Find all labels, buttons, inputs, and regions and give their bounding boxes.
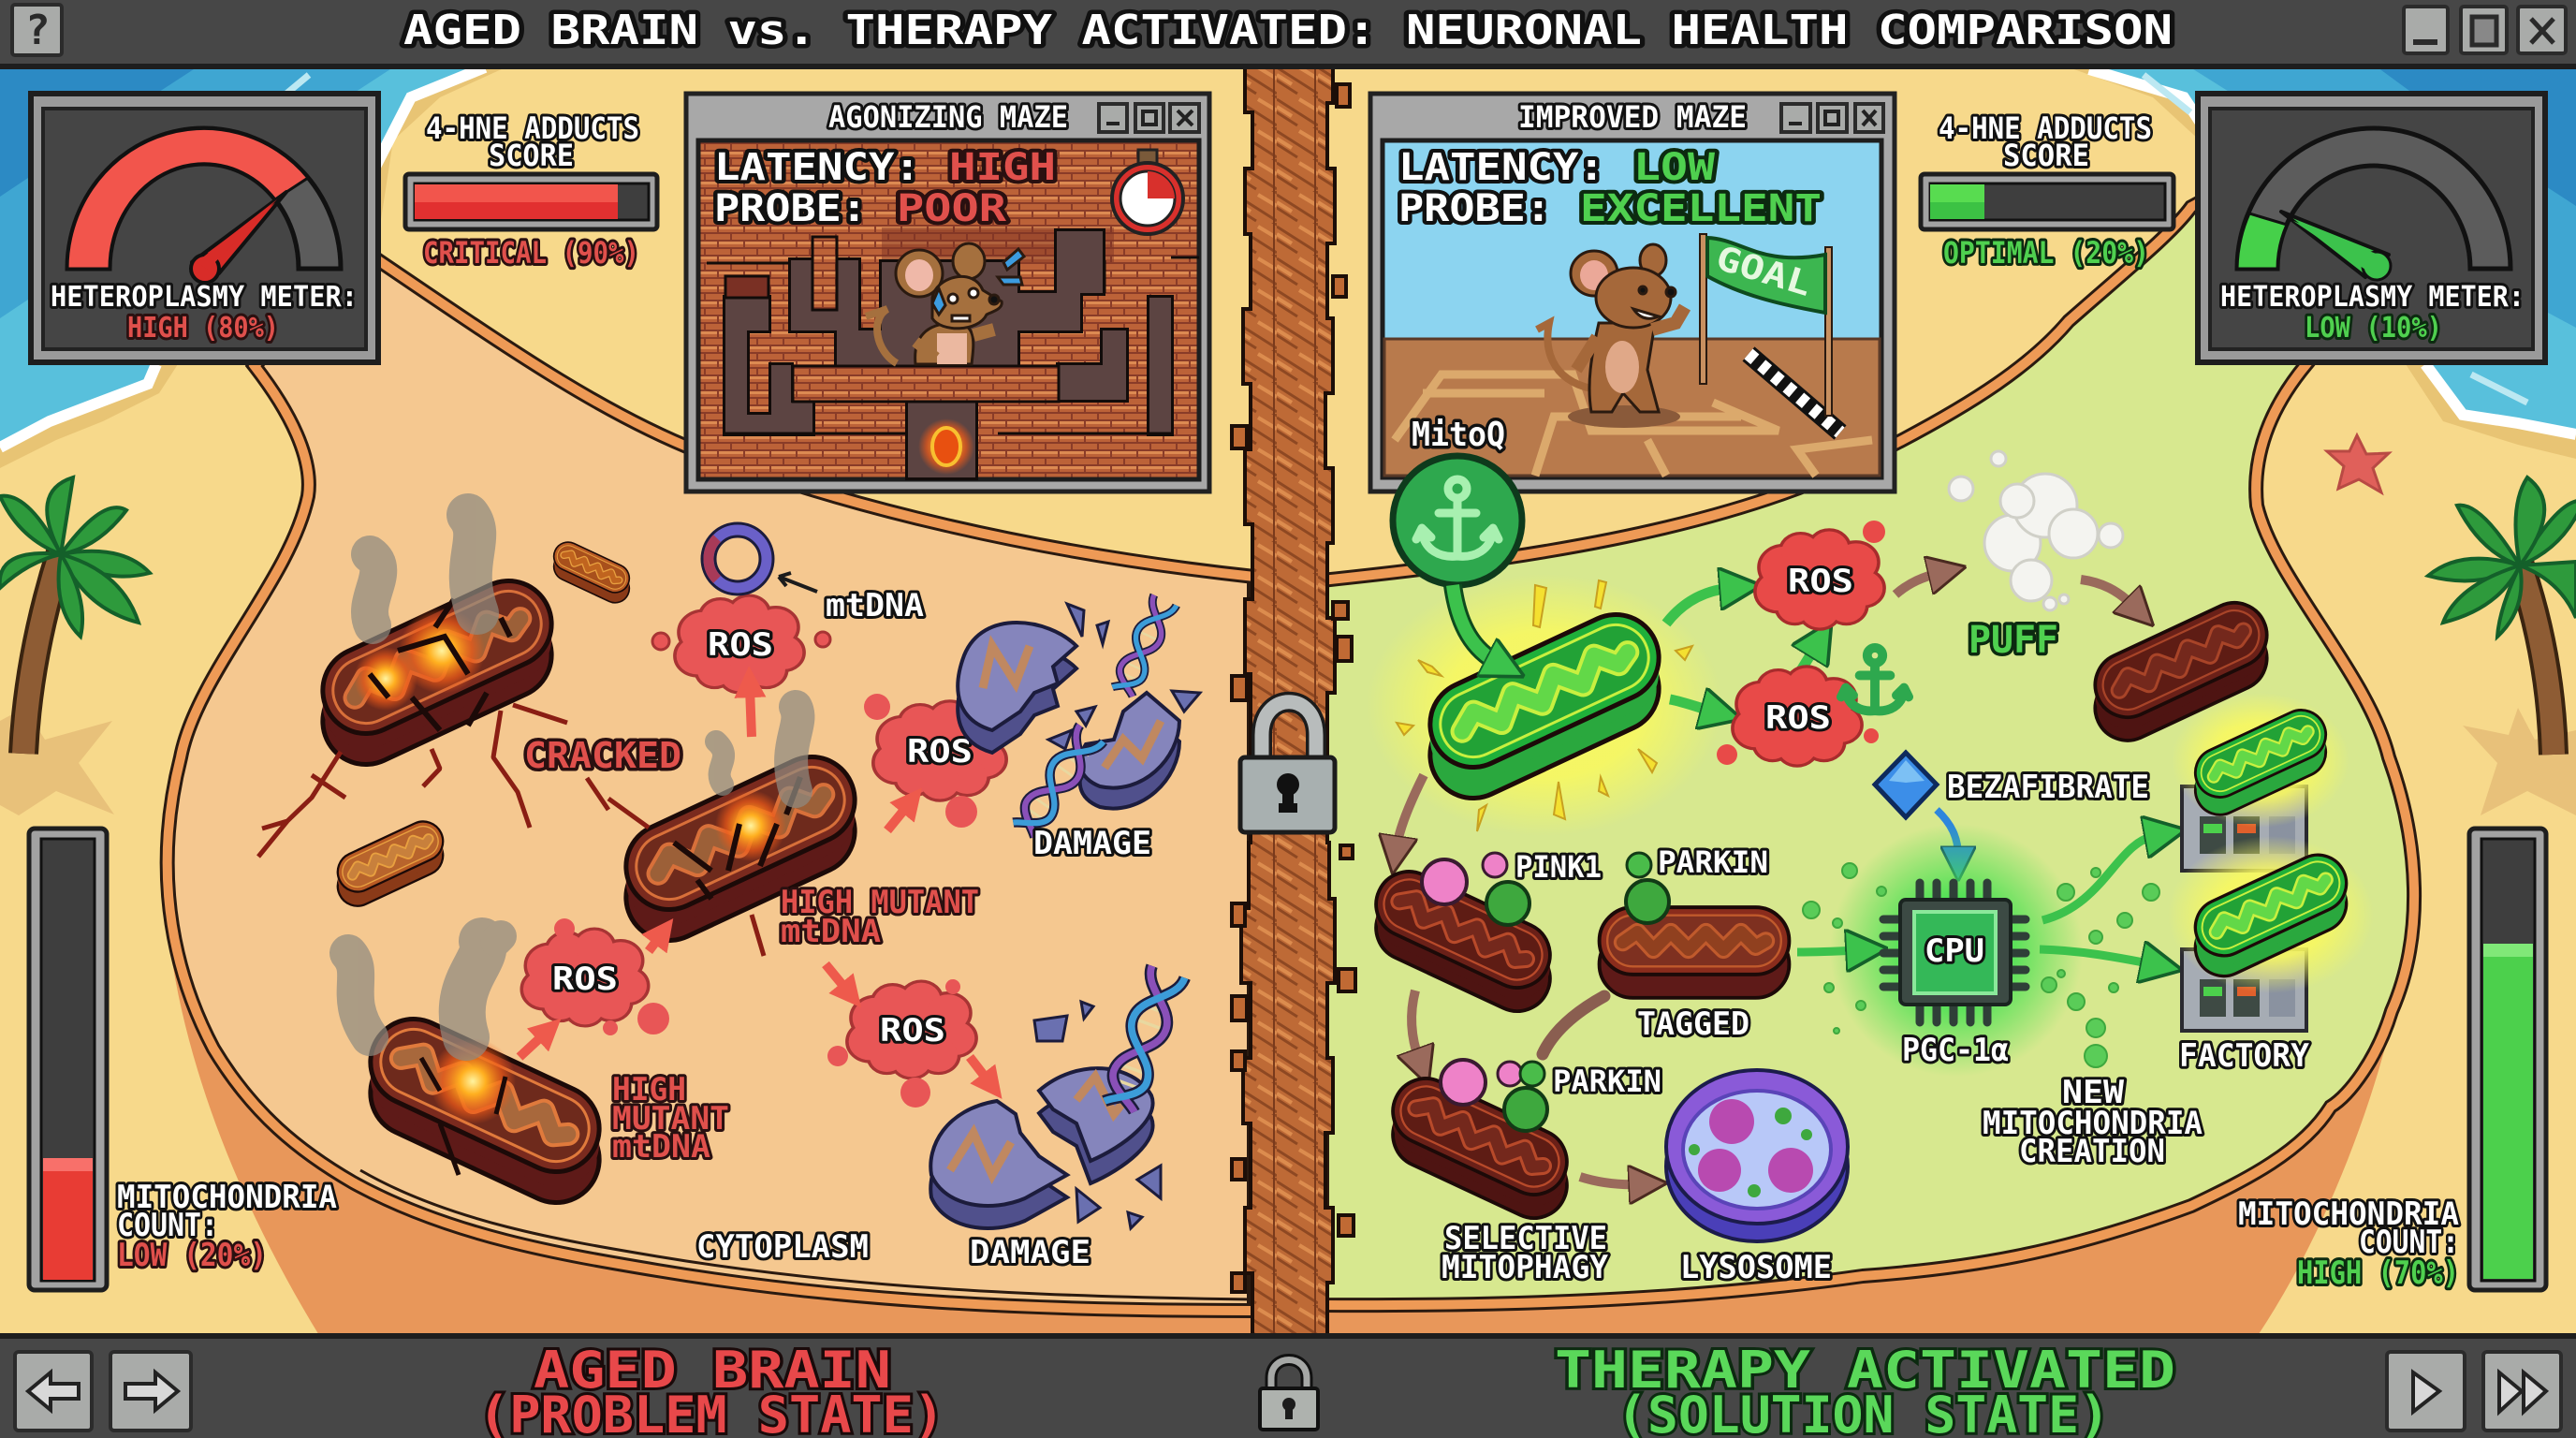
- Parkin label upper: PARKIN: [1658, 844, 1768, 880]
- damaged mitochondrion upper: [958, 594, 1200, 838]
- right ocean corner: [2069, 67, 2576, 459]
- left mitochondria count bar: [29, 829, 107, 1290]
- Parkin protein: [1486, 882, 1530, 925]
- play button: [2387, 1352, 2465, 1431]
- left mitochondria count label: MITOCHONDRIA: [117, 1179, 337, 1216]
- blue arrow to CPU: [1937, 810, 1958, 857]
- selective mitophagy label: SELECTIVE: [1444, 1220, 1607, 1257]
- cracked label: CRACKED: [524, 735, 681, 776]
- probe value: EXCELLENT: [1580, 187, 1822, 230]
- panel: agonizing maze window: [686, 94, 1209, 492]
- high mutant mtDNA label centre: HIGH MUTANT: [781, 884, 979, 921]
- left mitochondria count label: LOW (20%): [117, 1237, 267, 1274]
- help button: ?: [25, 7, 51, 54]
- aged brain caption: AGED BRAIN: [534, 1341, 891, 1400]
- mtDNA arrow: [779, 573, 817, 592]
- title: AGED BRAIN vs. THERAPY ACTIVATED: NEURONAL HEALTH COMPARISON: [403, 7, 2173, 54]
- right mitochondria count label: MITOCHONDRIA: [2238, 1196, 2459, 1233]
- padlock centre: [1240, 702, 1335, 832]
- gauge arc: [2237, 128, 2510, 280]
- brown connector tagged to mitophagy: [1543, 996, 1604, 1054]
- left ocean corner: [0, 67, 505, 468]
- panel: left heteroplasmy gauge: [31, 94, 378, 362]
- new mitochondria creation label: MITOCHONDRIA: [1983, 1105, 2203, 1142]
- icon: CPU chip: [1883, 883, 2026, 1022]
- high mutant mtDNA label centre: mtDNA: [781, 913, 881, 950]
- panel: left 4-HNE score: [405, 110, 657, 271]
- right mitochondria count label: [2238, 1196, 2459, 1292]
- puff label: PUFF: [1969, 619, 2058, 662]
- maze corridors: [707, 231, 1199, 477]
- panel: left 4-HNE score: SCORE: [489, 138, 574, 173]
- icon: small anchor: [1841, 648, 1909, 711]
- small pink marker: [1483, 853, 1507, 877]
- mitochondrion: cracked top: [309, 566, 565, 779]
- gauge label: HETEROPLASMY METER:: [51, 281, 358, 314]
- high mutant mtDNA label lower: mtDNA: [612, 1128, 710, 1166]
- high mutant mtDNA label lower: MUTANT: [612, 1100, 729, 1137]
- PINK1 protein: [1422, 859, 1467, 904]
- small parkin marker: [1627, 853, 1651, 877]
- maze centre wall: [793, 366, 1059, 402]
- therapy activated caption: [1555, 1341, 2175, 1438]
- ROS cloud lower left: [523, 918, 669, 1035]
- icon: exit coin: [918, 418, 974, 475]
- brown arrows through puff: [1895, 573, 2134, 607]
- green glow behind CPU: [1830, 824, 2083, 1077]
- right mitochondria count label: HIGH (70%): [2297, 1255, 2459, 1292]
- PINK1 label: PINK1: [1515, 849, 1602, 885]
- green arrows to factories: [2040, 835, 2157, 964]
- fast forward button: [2483, 1352, 2561, 1431]
- icon: CPU chip: CPU: [1925, 932, 1984, 970]
- mitochondrion: activated green: [1416, 600, 1673, 813]
- anchor badge MitoQ: [1393, 456, 1522, 585]
- gauge value: HIGH (80%): [127, 312, 279, 345]
- maze floor: [1384, 339, 1880, 476]
- icon: lysosome: [1666, 1070, 1848, 1241]
- ROS cloud lower right: [827, 979, 974, 1108]
- right mitochondria count label: COUNT:: [2359, 1224, 2459, 1261]
- cytoplasm label: CYTOPLASM: [696, 1228, 869, 1266]
- mitochondrion: high mutant centre: [612, 742, 869, 955]
- lysosome label: LYSOSOME: [1680, 1249, 1832, 1286]
- icon: happy mouse: [1537, 244, 1685, 428]
- mitochondrion on factory top: [2172, 693, 2349, 828]
- damage label lower: DAMAGE: [970, 1234, 1090, 1271]
- probe label: PROBE:: [1398, 187, 1551, 230]
- ROS cloud lower right: ROS: [880, 1012, 945, 1049]
- gauge arc: [67, 128, 341, 283]
- icon: struggling mouse: [866, 243, 1024, 364]
- forward arrow button: [110, 1352, 191, 1431]
- right mitochondria count bar: [2469, 829, 2546, 1290]
- selective mitophagy label: MITOPHAGY: [1442, 1249, 1609, 1286]
- window buttons: [2404, 7, 2566, 53]
- high mutant mtDNA label lower: HIGH: [612, 1071, 686, 1108]
- gauge label: HETEROPLASMY METER:: [2220, 281, 2525, 314]
- latency value: LOW: [1633, 146, 1716, 189]
- panel: right heteroplasmy gauge: [2198, 94, 2545, 362]
- gauge value: LOW (10%): [2305, 312, 2442, 345]
- mitochondrion: high mutant lower: [357, 1005, 613, 1217]
- darker upper bricks: [882, 227, 1114, 262]
- ROS cloud top: ROS: [708, 626, 773, 664]
- Parkin label lower: PARKIN: [1553, 1064, 1661, 1099]
- small mitochondrion top: [549, 537, 634, 608]
- red ROS arrows: [520, 688, 988, 1081]
- panel: aged brain cell: [164, 243, 1254, 1337]
- icon: stopwatch: [1112, 150, 1183, 234]
- new mitochondria creation label: CREATION: [2019, 1133, 2165, 1170]
- therapy activated caption: THERAPY ACTIVATED: [1555, 1341, 2175, 1400]
- ROS cloud lower: [1717, 668, 1879, 765]
- palm tree left: [0, 477, 150, 815]
- smoke plumes: [348, 515, 798, 1037]
- icon: bezafibrate diamond: [1875, 753, 1937, 817]
- panel: right 4-HNE score: OPTIMAL (20%): [1943, 235, 2149, 271]
- panel: right 4-HNE score: 4-HNE ADDUCTS: [1939, 110, 2152, 146]
- window title: AGONIZING MAZE: [828, 99, 1068, 135]
- icon: mtDNA ring: [709, 530, 767, 588]
- small mitochondrion left: [331, 815, 449, 913]
- high mutant mtDNA label lower: [612, 1071, 729, 1166]
- panel: right 4-HNE score: SCORE: [2003, 138, 2089, 173]
- palm tree right: [2428, 477, 2576, 815]
- green arrows to ROS: [1666, 588, 1816, 712]
- brown arrow to selective mitochondrion: [1412, 990, 1419, 1060]
- new mitochondria creation label: NEW: [2062, 1074, 2125, 1111]
- left mitochondria count label: COUNT:: [117, 1207, 218, 1244]
- bottom padlock: [1260, 1359, 1318, 1430]
- left mitochondria count label: [117, 1179, 337, 1274]
- ROS cloud upper right: [864, 694, 1004, 828]
- back arrow button: [15, 1352, 92, 1431]
- panel: right 4-HNE score: [1921, 110, 2174, 271]
- top bar: [0, 0, 2576, 69]
- factory bottom: [2182, 949, 2306, 1031]
- puff smoke cloud: [1949, 451, 2123, 610]
- ROS cloud upper right: ROS: [907, 733, 973, 770]
- damage label upper: DAMAGE: [1033, 825, 1151, 862]
- mitochondrion on factory bottom: [2168, 836, 2374, 993]
- panel: improved maze window: [1370, 94, 1895, 492]
- green arrow from tagged to CPU: [1797, 950, 1858, 952]
- yellow glow around mitochondrion: [1367, 574, 1722, 836]
- icon: starfish: [2327, 435, 2389, 492]
- latency label: LATENCY:: [714, 146, 920, 189]
- mtDNA label: mtDNA: [826, 587, 924, 624]
- panel: left 4-HNE score: CRITICAL (90%): [423, 235, 639, 271]
- new mitochondria creation label: [1983, 1074, 2203, 1170]
- tagged label: TAGGED: [1637, 1005, 1749, 1043]
- selective mitophagy label: [1442, 1220, 1609, 1286]
- panel: left 4-HNE score: 4-HNE ADDUCTS: [426, 110, 639, 146]
- green arrow from anchor to mitochondrion: [1453, 585, 1498, 663]
- mitochondrion: pink1 tagged: [1366, 859, 1560, 1022]
- high mutant mtDNA label centre: [781, 884, 979, 950]
- aged brain caption: [478, 1341, 944, 1438]
- bottom bar: [0, 1333, 2576, 1438]
- sparks around mitochondrion: [1397, 580, 1692, 831]
- latency label: LATENCY:: [1398, 146, 1604, 189]
- window title: IMPROVED MAZE: [1518, 99, 1747, 135]
- goal flag: GOAL: [1711, 239, 1816, 304]
- ROS cloud lower left: ROS: [552, 961, 618, 998]
- factory label: FACTORY: [2179, 1037, 2310, 1075]
- PGC-1 alpha label: PGC-1α: [1902, 1032, 2009, 1069]
- brown arrow to lysosome: [1580, 1177, 1640, 1184]
- help button: [12, 5, 62, 55]
- probe value: POOR: [897, 187, 1007, 230]
- ROS cloud upper: ROS: [1788, 563, 1853, 600]
- cracks spreading from mitochondrion: [258, 705, 764, 956]
- mitochondrion: tagged: [1600, 880, 1789, 998]
- panel: therapy activated cell: [1322, 187, 2415, 1337]
- goal flag: [1700, 234, 1832, 416]
- window buttons: [1099, 104, 1199, 132]
- ROS cloud upper: [1757, 521, 1885, 628]
- checkered finish line: [1749, 354, 1840, 433]
- latency value: HIGH: [949, 146, 1056, 189]
- MitoQ label: MitoQ: [1412, 416, 1505, 454]
- green dots: [1803, 863, 2159, 1067]
- factory top: [2182, 786, 2306, 871]
- brown arrow to pink1 mitochondrion: [1397, 775, 1424, 847]
- ROS cloud lower: ROS: [1765, 699, 1831, 737]
- damaged mitochondrion lower: [930, 966, 1185, 1228]
- window buttons: [1781, 104, 1883, 132]
- mitochondrion: selective mitophagy: [1383, 1060, 1577, 1229]
- mitochondrion: damaged dark: [2085, 593, 2277, 751]
- probe label: PROBE:: [714, 187, 867, 230]
- central brick wall: [1232, 67, 1355, 1337]
- ROS cloud top: [652, 597, 830, 691]
- small pink and green markers: [1498, 1062, 1544, 1086]
- bezafibrate label: BEZAFIBRATE: [1947, 769, 2149, 806]
